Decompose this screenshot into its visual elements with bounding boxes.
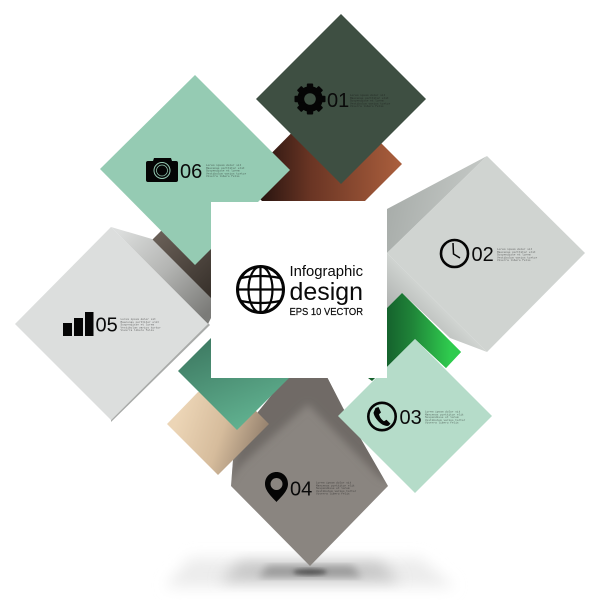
panel: brown back diamond [243, 93, 402, 201]
text block 06: Viverra libero felis [206, 174, 240, 178]
panel: green foreground tip over grey [387, 293, 461, 368]
text block 04: Maecenas porttitor elit [316, 483, 355, 487]
panel 01 [256, 14, 426, 184]
number 04: 04 [290, 478, 312, 500]
icon: bars [63, 312, 94, 336]
panel 04 [231, 378, 388, 566]
text block 04: Lorem ipsum dolor sit [316, 480, 352, 484]
text block 03: Lorem ipsum dolor sit [425, 410, 461, 414]
text block 01: Vestibulum varius tortor [350, 101, 391, 105]
number 02: 02 [472, 244, 494, 266]
text block 05: Vestibulum varius tortor [120, 325, 161, 329]
ground shadow [165, 558, 455, 587]
text block 02: Suspendisse et lorem [497, 253, 531, 257]
text block 02: Vestibulum varius tortor [497, 255, 538, 259]
icon: clock [441, 240, 468, 267]
text block 03: Viverra libero felis [425, 421, 459, 425]
panel 05 [15, 227, 211, 422]
text block 02: Lorem ipsum dolor sit [497, 247, 533, 251]
icon: gear [294, 84, 326, 114]
panel 06 [100, 75, 290, 265]
text block 06: Maecenas porttitor elit [206, 166, 245, 170]
text block 04: Vestibulum varius tortor [316, 489, 357, 493]
number 03: 03 [400, 407, 422, 429]
icon: phone [368, 403, 396, 430]
text block 06: Vestibulum varius tortor [206, 171, 247, 175]
subtitle: EPS 10 VECTOR [290, 306, 363, 318]
panel 02 [387, 156, 585, 352]
center panel [211, 202, 387, 378]
text block 02: Maecenas porttitor elit [497, 250, 536, 254]
text block 04: Suspendisse et lorem [316, 486, 350, 490]
text block 01: Suspendisse et lorem [350, 99, 384, 103]
text block 06: Suspendisse et lorem [206, 169, 240, 173]
number 05: 05 [96, 314, 118, 336]
text block 03: Suspendisse et lorem [425, 415, 459, 419]
text block 05: Viverra libero felis [120, 328, 154, 332]
icon: globe [237, 266, 284, 313]
text block 05: Maecenas porttitor elit [120, 320, 159, 324]
panel: green lower diamond [178, 312, 296, 430]
text block 05: Suspendisse et lorem [120, 323, 154, 327]
title: design: design [290, 278, 363, 306]
text block 01: Lorem ipsum dolor sit [350, 93, 386, 97]
text block 04: Viverra libero felis [316, 492, 350, 496]
number 06: 06 [180, 161, 202, 183]
panel: dark taupe back diamond [152, 200, 240, 299]
text block 01: Maecenas porttitor elit [350, 96, 389, 100]
number 01: 01 [327, 90, 349, 112]
panel: green back diamond [368, 293, 461, 381]
text block 01: Viverra libero felis [350, 104, 384, 108]
icon: camera [146, 158, 178, 182]
text block 05: Lorem ipsum dolor sit [120, 317, 156, 321]
panel: beige back diamond [167, 392, 269, 475]
text block 06: Lorem ipsum dolor sit [206, 163, 242, 167]
text block 03: Vestibulum varius tortor [425, 418, 466, 422]
panel 03 [338, 339, 492, 493]
text block 03: Maecenas porttitor elit [425, 412, 464, 416]
icon: map pin [265, 472, 288, 502]
title: Infographic: Infographic [290, 264, 363, 280]
text block 02: Viverra libero felis [497, 258, 531, 262]
